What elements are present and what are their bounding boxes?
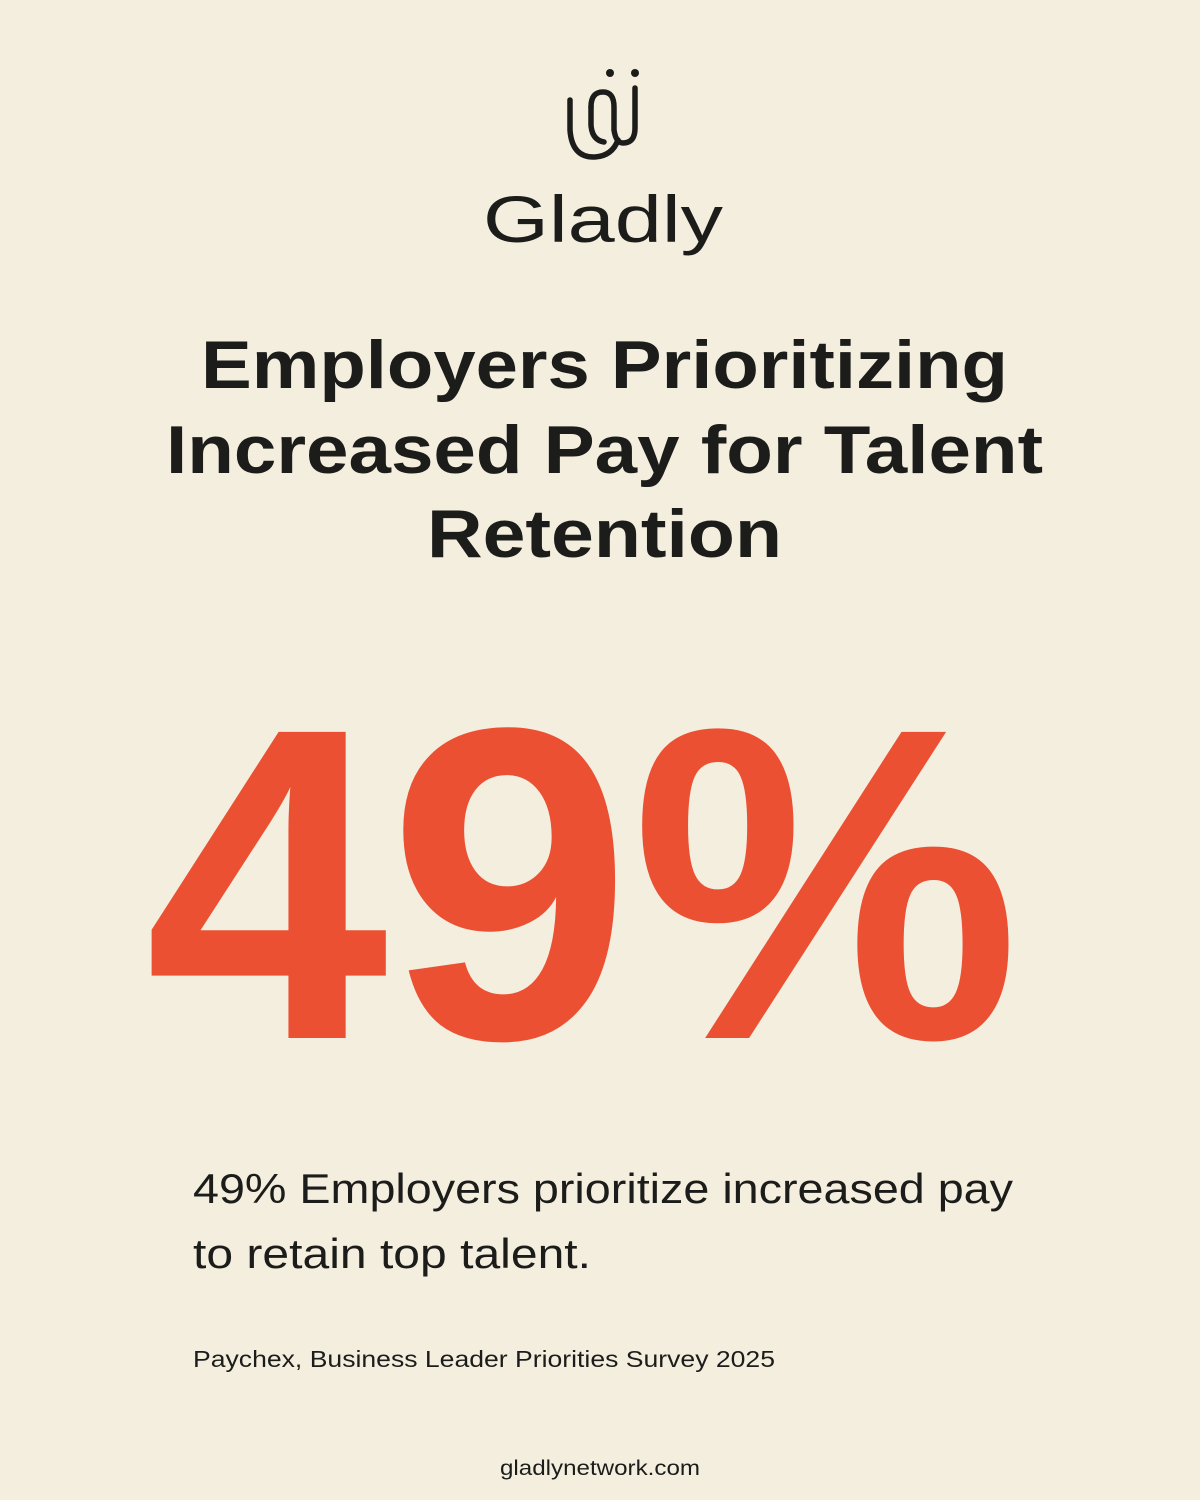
wordmark: Gladly	[483, 182, 723, 256]
big stat: 49%: 49%	[145, 636, 1020, 1133]
body text	[193, 1165, 1013, 1277]
body text: to retain top talent.	[193, 1230, 591, 1277]
title: Retention	[427, 496, 782, 572]
body text: 49% Employers prioritize increased pay	[193, 1165, 1013, 1212]
title: Employers Prioritizing	[201, 327, 1008, 403]
footer url: gladlynetwork.com	[500, 1457, 700, 1480]
source: Paychex, Business Leader Priorities Survey 2025	[193, 1346, 775, 1372]
title: Increased Pay for Talent	[166, 412, 1043, 488]
icon: logo mark	[570, 88, 635, 157]
title	[166, 327, 1043, 572]
logo: Gladly mark and wordmark	[483, 69, 723, 256]
